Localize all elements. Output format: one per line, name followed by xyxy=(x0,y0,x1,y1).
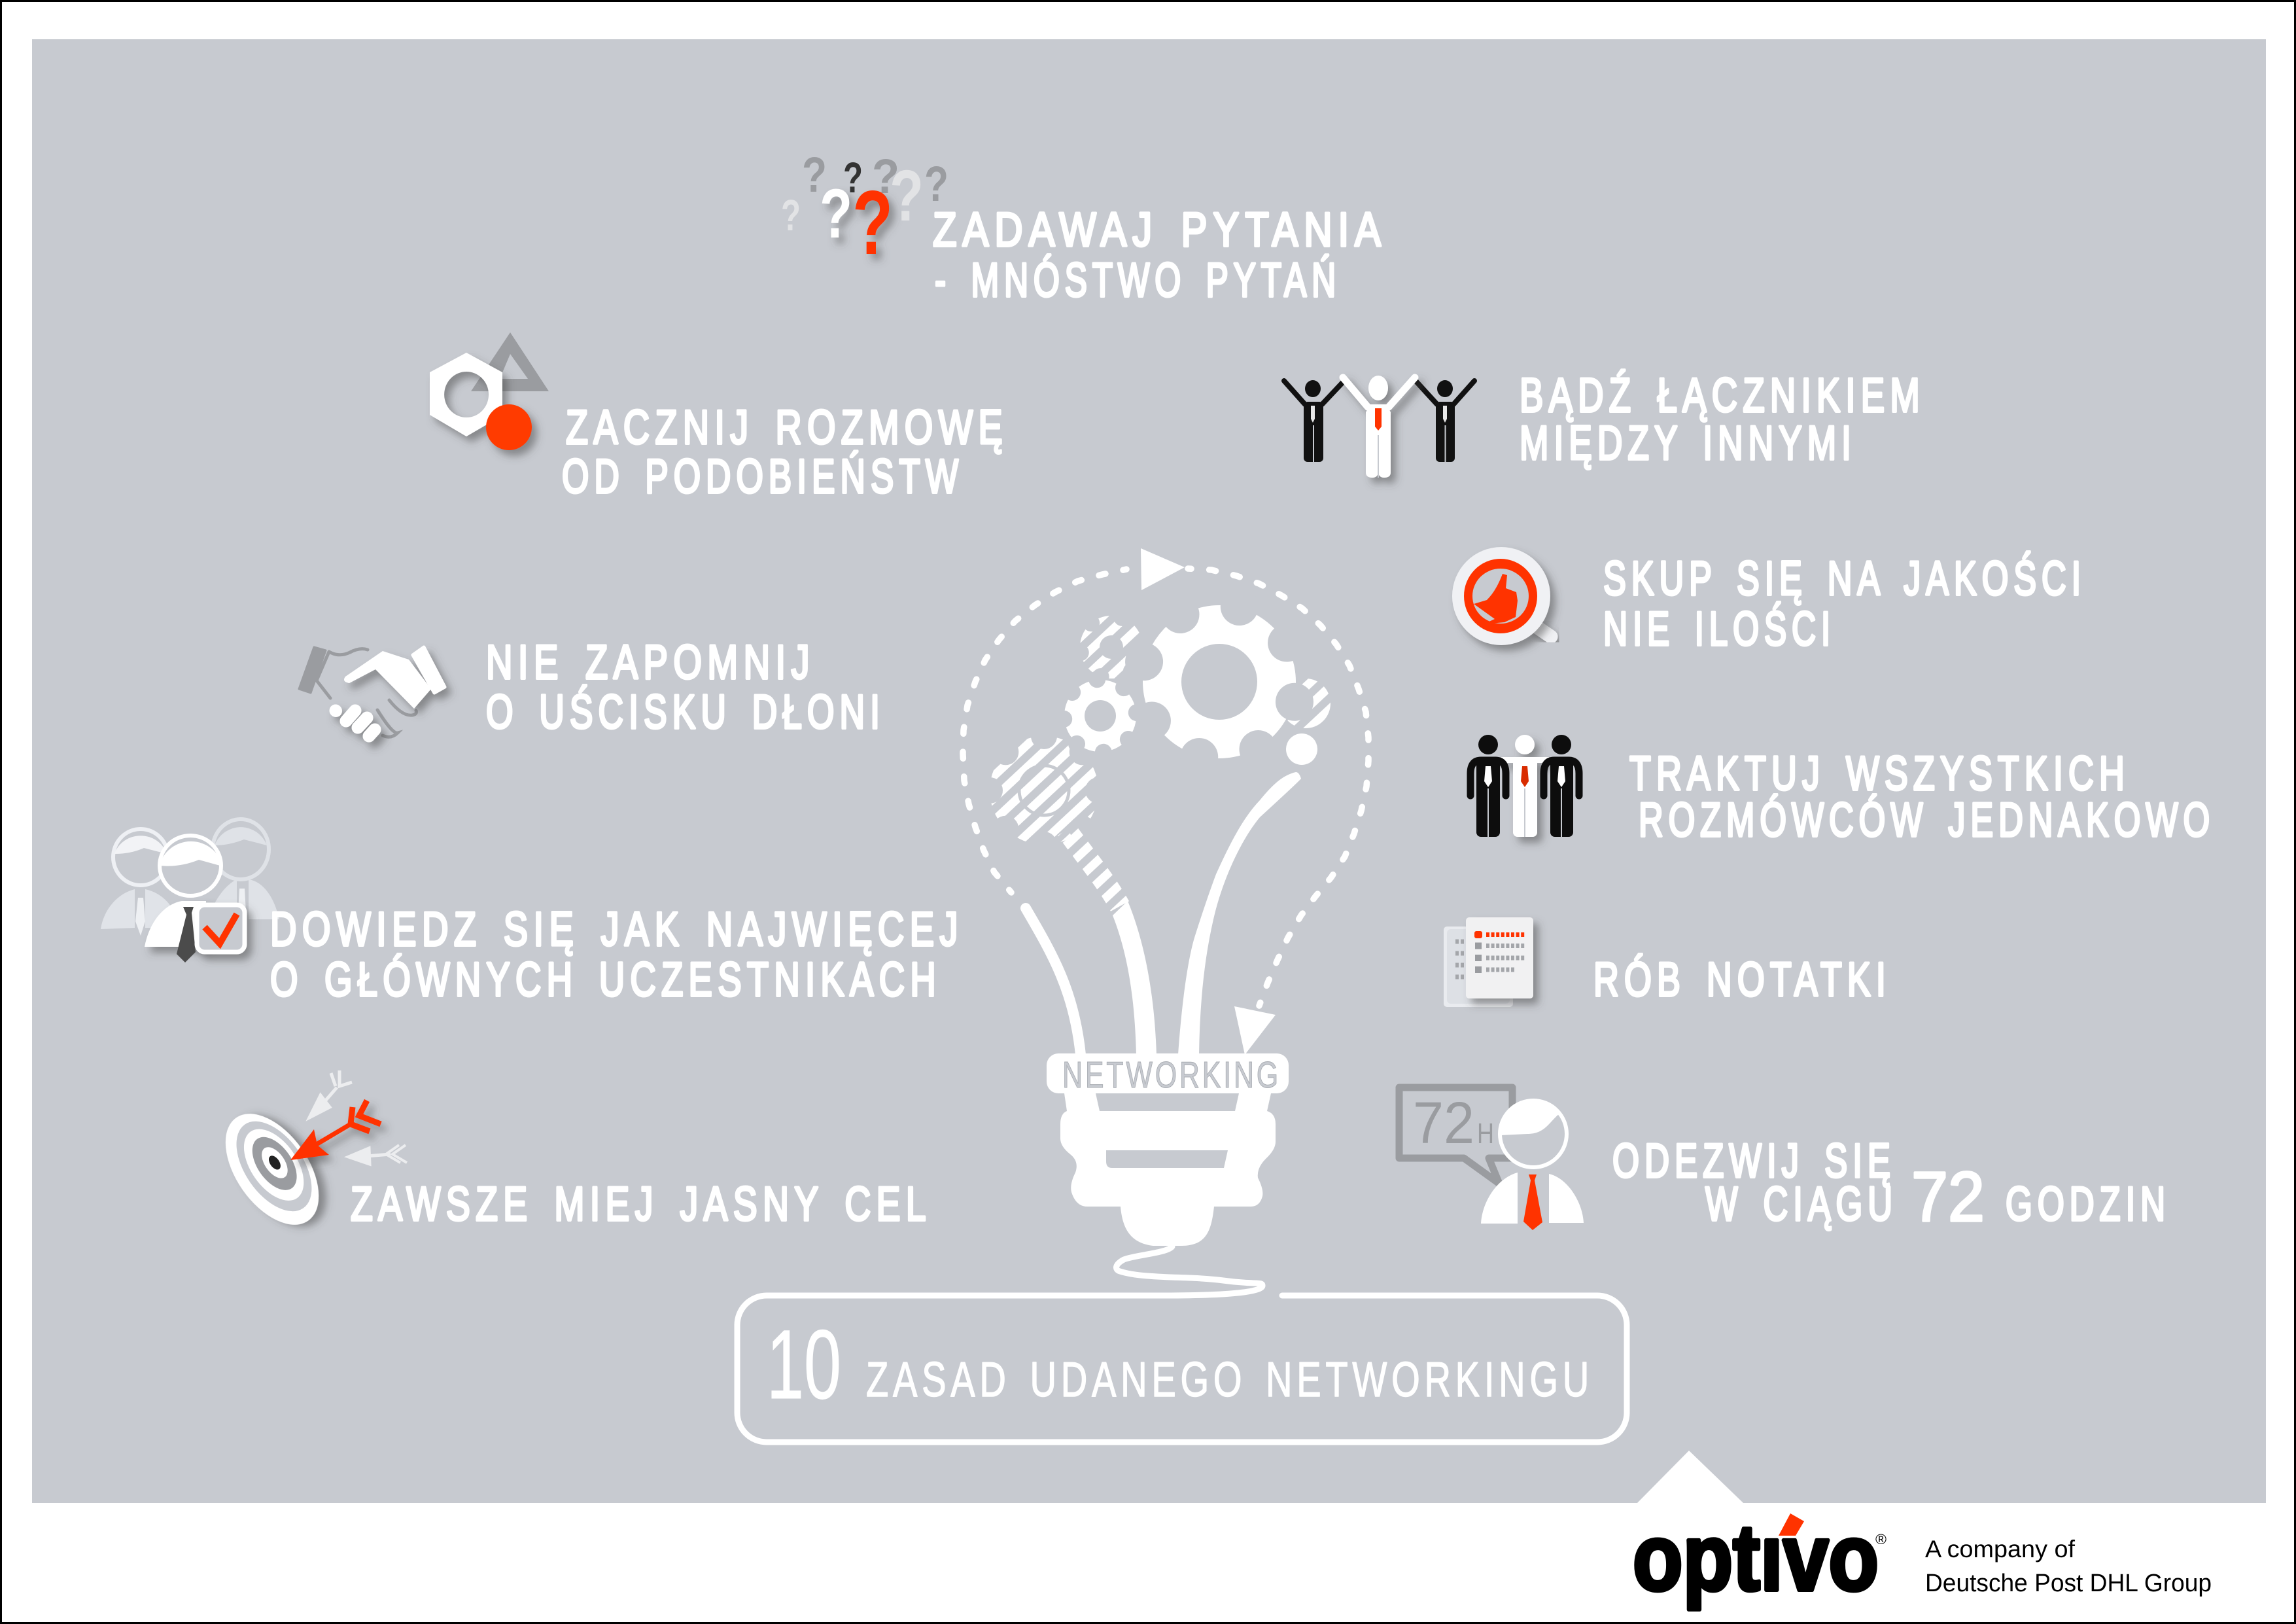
logo: optivo: ® xyxy=(1875,1531,1887,1547)
wire and title box xyxy=(737,1246,1627,1442)
text: zacznij rozmowe: ZACZNIJ ROZMOWĘ xyxy=(566,401,1008,454)
striped gear right xyxy=(1281,679,1331,728)
text: dowiedz sie: DOWIEDZ SIĘ JAK NAJWIĘCEJ xyxy=(270,903,964,956)
icon: question marks: ? xyxy=(843,153,863,202)
icon: magnifier with thumb xyxy=(1452,547,1551,645)
icon: question marks: ? xyxy=(890,156,924,236)
bulb label: NETWORKING xyxy=(1062,1054,1281,1096)
text: nie zapomnij xyxy=(486,636,885,739)
title: ZASAD UDANEGO NETWORKINGU xyxy=(866,1352,1593,1407)
text: zadawaj pytania: ZADAWAJ PYTANIA xyxy=(933,203,1387,256)
text: odezwij sie w ciagu 72 godzin: ODEZWIJ SIĘ xyxy=(1612,1135,1896,1188)
icon: question marks xyxy=(781,147,948,274)
icon: 72h speech bubble and man xyxy=(1399,1087,1584,1230)
text: company note: A company of xyxy=(1925,1536,2076,1562)
text: odezwij sie w ciagu 72 godzin: W CIĄGU xyxy=(1705,1178,1898,1231)
big gear xyxy=(1121,584,1317,780)
text: zadawaj pytania xyxy=(933,203,1387,307)
icon: question marks: ? xyxy=(872,149,899,203)
text: company note xyxy=(1925,1536,2212,1597)
icon: question marks: ? xyxy=(820,174,852,253)
striped gear upper xyxy=(1071,607,1152,688)
text: odezwij sie w ciagu 72 godzin xyxy=(1612,1135,2170,1236)
text: odezwij sie w ciagu 72 godzin: GODZIN xyxy=(2006,1178,2170,1231)
icon: note sheets xyxy=(1444,917,1533,1007)
icon: three men standing xyxy=(1470,735,1579,837)
title xyxy=(767,1309,1593,1419)
icon: question marks: ? xyxy=(802,147,827,203)
small gear xyxy=(1054,670,1146,762)
text: zawsze miej jasny cel: ZAWSZE MIEJ JASNY CEL xyxy=(351,1178,931,1231)
text: skup sie na jakosci: SKUP SIĘ NA JAKOŚCI xyxy=(1603,552,2086,605)
text: zacznij rozmowe xyxy=(562,401,1008,503)
text: badz lacznikiem: BĄDŹ ŁĄCZNIKIEM xyxy=(1520,369,1925,422)
text: company note: Deutsche Post DHL Group xyxy=(1925,1570,2212,1597)
text: zadawaj pytania: - MNÓSTWO PYTAŃ xyxy=(935,254,1341,307)
icon: question marks: ? xyxy=(924,156,948,212)
arrow: bottom arrowhead xyxy=(1234,1006,1276,1055)
text: dowiedz sie: O GŁÓWNYCH UCZESTNIKACH xyxy=(270,953,941,1006)
icon: three people with raised arms xyxy=(1284,376,1474,478)
text: dowiedz sie xyxy=(270,903,964,1006)
text: nie zapomnij: NIE ZAPOMNIJ xyxy=(486,636,815,689)
icon: hexagon, triangle and circle xyxy=(430,332,549,450)
icon: question marks: ? xyxy=(781,191,801,240)
icon: 72h speech bubble and man: 72 xyxy=(1413,1091,1474,1156)
text: skup sie na jakosci: NIE ILOŚCI xyxy=(1603,603,1835,656)
chart: light bulb gears xyxy=(977,584,1331,858)
bulb base xyxy=(1047,1053,1289,1246)
striped gear large xyxy=(977,723,1111,858)
icon: handshake xyxy=(299,647,445,737)
icon: question marks: ? xyxy=(852,172,893,274)
chart: light bulb filaments xyxy=(1026,772,1301,1055)
text: rob notatki: RÓB NOTATKI xyxy=(1593,953,1891,1006)
text: zacznij rozmowe: OD PODOBIEŃSTW xyxy=(562,450,964,503)
icon: people group with checkbox xyxy=(101,819,279,962)
text: badz lacznikiem xyxy=(1520,369,1925,470)
icon: target with arrows xyxy=(207,1070,407,1241)
text: badz lacznikiem: MIĘDZY INNYMI xyxy=(1520,417,1856,470)
logo: optivo: optıvo xyxy=(1633,1505,1879,1610)
arrow: top arrowhead xyxy=(1141,548,1185,590)
filament dot xyxy=(1286,733,1317,765)
arrow: dashed bulb outline right xyxy=(1188,569,1368,1006)
text: nie zapomnij: O UŚCISKU DŁONI xyxy=(486,686,885,739)
arrow: dashed bulb outline left xyxy=(963,569,1126,892)
title: 10 xyxy=(767,1309,841,1419)
text: traktuj wszystkich xyxy=(1629,747,2215,847)
text: odezwij sie w ciagu 72 godzin: 72 xyxy=(1911,1157,1985,1236)
icon: 72h speech bubble and man: H xyxy=(1477,1118,1494,1150)
text: skup sie na jakosci xyxy=(1603,552,2086,656)
text: traktuj wszystkich: TRAKTUJ WSZYSTKICH xyxy=(1629,747,2130,800)
